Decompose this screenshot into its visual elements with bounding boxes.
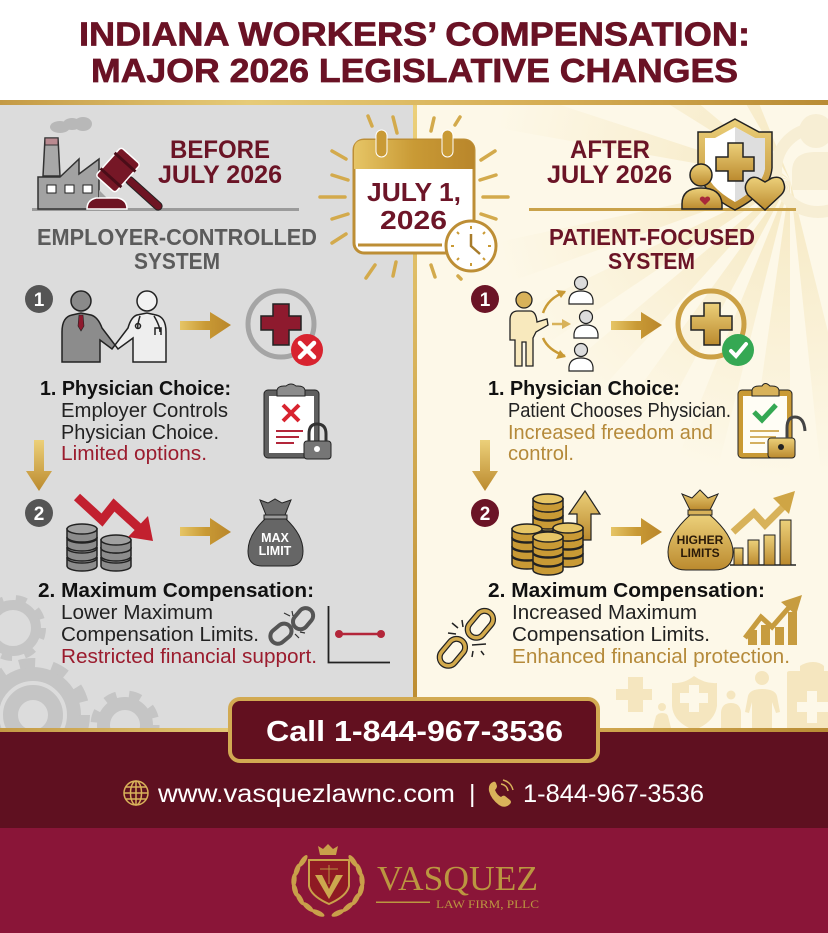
text block: left physician choice: 1. Physician Choice: xyxy=(40,378,231,400)
gold central divider xyxy=(413,105,417,728)
badge: left 2 xyxy=(25,499,53,527)
right heading: after July 2026: AFTER xyxy=(570,136,650,164)
badge: left 2: 2 xyxy=(34,504,44,525)
text block: left maximum compensation: Compensation Limits. xyxy=(61,624,259,646)
contact website: www.vasquezlawnc.com xyxy=(157,780,455,808)
left subheading: EMPLOYER-CONTROLLED xyxy=(37,224,317,250)
badge: right 1 xyxy=(471,285,499,313)
text block: right physician choice xyxy=(488,378,731,465)
text block: right physician choice: 1. Physician Choice: xyxy=(488,378,680,400)
footer gold rule xyxy=(0,728,828,732)
call button xyxy=(230,699,598,761)
icon: calendar July 1, 2026 xyxy=(354,130,474,253)
arrow: right step 2 xyxy=(611,518,662,545)
icon: factory with gavel xyxy=(38,117,174,223)
icon: money bag higher limits with rising chart xyxy=(668,490,796,570)
icon: broken chain grey xyxy=(267,605,316,647)
text block: right physician choice: Patient Chooses Physician. xyxy=(508,400,731,422)
icon: clipboard with lock xyxy=(264,384,331,459)
title: MAJOR 2026 LEGISLATIVE CHANGES xyxy=(91,52,738,89)
contact phone: 1-844-967-3536 xyxy=(523,780,704,808)
icon: coins with falling red arrow xyxy=(67,497,153,571)
text block: right maximum compensation: Enhanced financial protection. xyxy=(512,646,790,668)
logo: Vasquez crest xyxy=(291,844,365,918)
icon: gold growth chart xyxy=(745,595,802,645)
icon: calendar July 1, 2026: 2026 xyxy=(380,205,447,235)
call button: Call 1-844-967-3536 xyxy=(266,716,563,748)
icon: gold cross approved xyxy=(678,291,754,366)
right subheading xyxy=(549,224,755,274)
arrow: left step 2 xyxy=(180,518,231,545)
icon: money bag max limit: LIMIT xyxy=(259,544,292,558)
text block: right maximum compensation: 2. Maximum Compensation: xyxy=(488,580,765,602)
text block: right physician choice: Increased freedom and xyxy=(508,422,713,444)
left heading: before July 2026 xyxy=(158,136,282,189)
icon: phone xyxy=(489,780,513,807)
arrow: left step 1 xyxy=(180,312,231,339)
title: INDIANA WORKERS’ COMPENSATION: xyxy=(79,16,750,52)
badge: right 2 xyxy=(471,499,499,527)
text block: left maximum compensation xyxy=(38,580,317,668)
divider line left xyxy=(32,208,299,211)
icon: globe xyxy=(124,781,148,805)
icon: patient choosing among doctors xyxy=(510,276,598,371)
icon: employer and doctor handshake xyxy=(62,291,166,362)
text block: left physician choice xyxy=(40,378,231,465)
title xyxy=(79,16,750,89)
left heading: before July 2026: BEFORE xyxy=(170,136,270,164)
icon: clock xyxy=(446,221,496,271)
divider line right xyxy=(529,208,796,211)
icon: money bag max limit: MAX xyxy=(261,531,290,545)
icon: money bag higher limits with rising chart: LIMITS xyxy=(680,546,720,560)
contact separator: | xyxy=(469,780,476,808)
text block: right maximum compensation: Compensation Limits. xyxy=(512,624,710,646)
badge: right 1: 1 xyxy=(480,290,491,311)
icon: medical cross rejected xyxy=(248,291,323,366)
logo: Vasquez wordmark: VASQUEZ xyxy=(377,859,538,898)
icon: calendar July 1, 2026: JULY 1, xyxy=(367,177,461,207)
text block: left physician choice: Limited options. xyxy=(61,443,207,465)
text block: right maximum compensation xyxy=(488,580,790,668)
right subheading: SYSTEM xyxy=(608,248,695,274)
calendar rays xyxy=(320,116,508,279)
icon: clipboard with open lock xyxy=(738,384,805,458)
left heading: before July 2026: JULY 2026 xyxy=(158,161,282,189)
right heading: after July 2026: JULY 2026 xyxy=(547,161,672,189)
text block: left physician choice: Employer Controls xyxy=(61,400,228,422)
right subheading: PATIENT-FOCUSED xyxy=(549,224,755,250)
footer band: contact xyxy=(0,730,828,828)
icon: money bag higher limits with rising chart: HIGHER xyxy=(677,533,724,547)
badge: left 1 xyxy=(25,285,53,313)
panel: before July 2026 background xyxy=(0,105,413,767)
arrow: left down xyxy=(26,440,52,491)
badge: right 2: 2 xyxy=(480,504,490,525)
logo: Vasquez wordmark: LAW FIRM, PLLC xyxy=(436,897,539,911)
footer band: logo xyxy=(0,828,828,933)
icon: broken chain gold xyxy=(436,607,497,669)
left subheading: SYSTEM xyxy=(134,248,220,274)
icon: shield with patient and heart xyxy=(682,119,785,210)
panel: after July 2026 background xyxy=(417,105,828,728)
text block: left physician choice: Physician Choice. xyxy=(61,422,219,444)
text block: left maximum compensation: Lower Maximum xyxy=(61,602,213,624)
chart: flat capped limit line xyxy=(328,606,390,662)
arrow: right step 1 xyxy=(611,312,662,339)
text block: right maximum compensation: Increased Maximum xyxy=(512,602,697,624)
icon: growing gold coins with up arrow xyxy=(512,491,600,575)
background: white header xyxy=(0,0,828,101)
icon: money bag max limit xyxy=(248,499,303,566)
text block: right physician choice: control. xyxy=(508,443,574,465)
text block: left maximum compensation: Restricted financial support. xyxy=(61,646,317,668)
right heading: after July 2026 xyxy=(547,136,672,189)
gold top divider xyxy=(0,100,828,105)
badge: left 1: 1 xyxy=(34,290,45,311)
left subheading xyxy=(37,224,317,274)
text block: left maximum compensation: 2. Maximum Compensation: xyxy=(38,580,314,602)
arrow: right down xyxy=(472,440,498,491)
